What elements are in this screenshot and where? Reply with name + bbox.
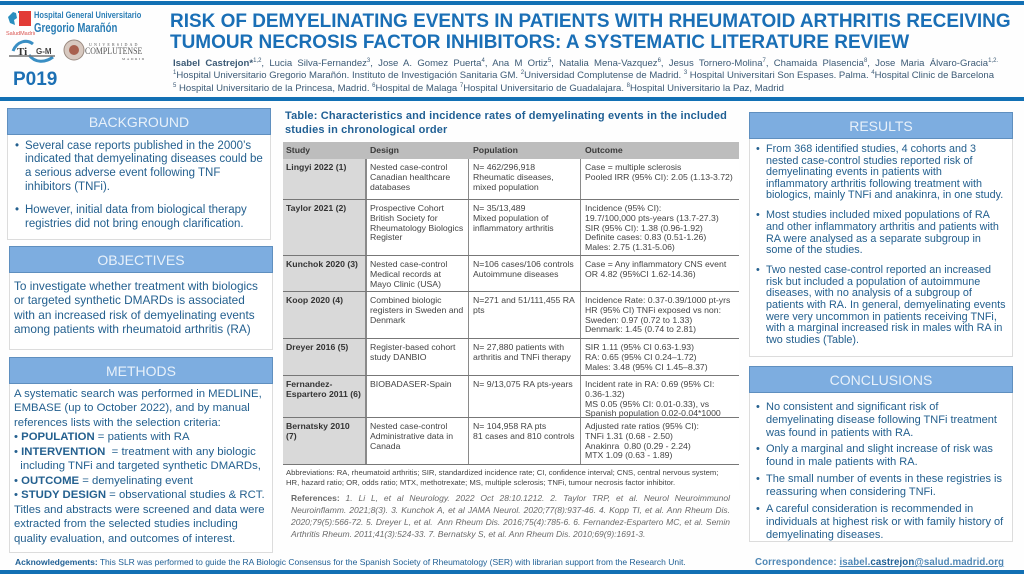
row: Dreyer: Register-based cohort bbox=[370, 342, 455, 352]
bullets: demyelinating events in patients with bbox=[766, 166, 942, 178]
bullets: A careful consideration is recommended in bbox=[766, 503, 973, 515]
row: Taylor: Register bbox=[370, 232, 402, 242]
row: Taylor: Definite cases: 0.83 (0.51-1.26) bbox=[585, 232, 706, 242]
correspondence: Correspondence: isabel.castrejon@salud.madrid.org bbox=[755, 557, 1004, 568]
row: Taylor: N= 35/13,489 bbox=[473, 203, 525, 213]
bullets: individuals at highest risk or with family history of bbox=[766, 516, 1003, 528]
heading: OBJECTIVES bbox=[97, 252, 185, 268]
row: Koop: pts bbox=[473, 305, 485, 315]
methods text: references lists with the selection criteria: bbox=[14, 416, 221, 428]
bottom bar bbox=[0, 570, 1024, 574]
bullets: biologics, mainly TNFi and anakinra, in one study. bbox=[766, 189, 1003, 201]
heading: CONCLUSIONS bbox=[830, 372, 932, 388]
row: Dreyer: SIR 1.11 (95% CI 0.63-1.93) bbox=[585, 342, 694, 352]
table header row: Outcome bbox=[585, 145, 623, 155]
bullets: RA were analysed as a separate subgroup in bbox=[766, 233, 981, 245]
bullets: nested case-control studies reported risk of bbox=[766, 155, 972, 167]
row: Kunchok: Case = Any inflammatory CNS event bbox=[585, 259, 726, 269]
bullets: demyelinating disease following TNFi treatment bbox=[766, 414, 997, 426]
poster number: P019 bbox=[13, 69, 57, 90]
bullets: indicated that demyelinating diseases could be bbox=[25, 153, 263, 165]
row: Dreyer: study DANBIO bbox=[370, 352, 426, 362]
row: Lingyi: Nested case-control bbox=[370, 162, 447, 172]
panel: background bbox=[7, 108, 271, 240]
row: Bernatsky: Nested case-control bbox=[370, 421, 447, 431]
logos bbox=[6, 10, 146, 63]
bullets: some of the studies. bbox=[766, 244, 863, 256]
methods text: Titles and abstracts were screened and data were bbox=[14, 504, 265, 516]
body box bbox=[9, 357, 273, 553]
row: Fernandez-Espartero: MS 0.05 (95% CI: 0.01-0.33), vs bbox=[585, 398, 709, 408]
table header row: Study bbox=[286, 145, 310, 155]
icon: university seal bbox=[64, 40, 84, 60]
row: Fernandez-Espartero: Spanish population 0.02-0.04*1000 bbox=[585, 408, 721, 418]
row: Koop: N=271 and 51/111,455 RA bbox=[473, 295, 575, 305]
bullets: From 368 identified studies, 4 cohorts and 3 bbox=[766, 143, 976, 155]
methods text bbox=[14, 388, 265, 544]
row: Koop: Koop 2020 (4) bbox=[286, 295, 343, 305]
objective text: among patients with rheumatoid arthritis (RA) bbox=[14, 322, 251, 336]
row: Dreyer: N= 27,880 patients with bbox=[473, 342, 564, 352]
authors: 1Hospital Universitario Gregorio Marañón. Instituto de Investigación Sanitaria GM. 2Universidad Complutense de Madrid. 3 Hospital Universitari Son Espases. Palma. 4Hospital Clinic de Barcelona bbox=[173, 70, 994, 81]
table header row: Population bbox=[473, 145, 518, 155]
acknowledgements: Acknowledgements: This SLR was performed to guide the RA Biologic Consensus for the Spanish Society of Rheumatology (SER) with librarian support from the Research Unit. bbox=[15, 557, 686, 567]
row: Lingyi: Case = multiple sclerosis bbox=[585, 162, 681, 172]
row: Lingyi: Rheumatic diseases, bbox=[473, 172, 554, 182]
row: Taylor: SIR (95% CI): 1.38 (0.96-1.92) bbox=[585, 222, 703, 232]
heading bbox=[9, 246, 273, 273]
row: Fernandez-Espartero: Espartero 2011 (6) bbox=[286, 389, 361, 399]
row: Lingyi bbox=[286, 162, 733, 192]
heading bbox=[7, 108, 271, 135]
row: Kunchok: Mayo Clinic (USA) bbox=[370, 278, 441, 288]
row: Bernatsky: Canada bbox=[370, 440, 400, 450]
row: Fernandez-Espartero: 0.36-1.32) bbox=[585, 389, 625, 399]
row: Taylor bbox=[286, 203, 719, 252]
abbreviations bbox=[286, 468, 718, 487]
university wordmark: COMPLUTENSE bbox=[85, 46, 142, 57]
objective text bbox=[14, 279, 258, 336]
authors: Isabel Castrejon*1,2, Lucia Silva-Fernandez3, Jose A. Gomez Puerta4, Ana M Ortiz5, Natalia Mena-Vazquez6, Jesus Tornero-Molina7, Chamaida Plasencia8, Jose Maria Álvaro-Gracia1,2. bbox=[173, 58, 998, 69]
table caption: Table: Characteristics and incidence rates of demyelinating events in the included bbox=[285, 110, 727, 122]
column lines bbox=[365, 159, 366, 464]
bullets: and other inflammatory arthritis and patients with bbox=[766, 221, 999, 233]
abbreviations: Abbreviations: RA, rheumatoid arthritis; SIR, standardized incidence rate; CI, confidence interval; CNS, central nervous system; bbox=[286, 468, 718, 477]
bullets: diseases, with no analysis of a subgroup of bbox=[766, 287, 972, 299]
row: Lingyi: mixed population bbox=[473, 182, 539, 192]
panel: results bbox=[749, 112, 1013, 357]
heading: BACKGROUND bbox=[89, 114, 189, 130]
authors: 5 Hospital Universitario de la Princesa, Madrid. 6Hospital de Malaga 7Hospital Universitario de Guadalajara. 8Hospital Universitario la Paz, Madrid bbox=[173, 82, 784, 94]
methods text: including TNFi and targeted synthetic DMARDs, bbox=[20, 460, 261, 472]
university wordmark bbox=[85, 42, 146, 61]
row: Taylor: Rheumatology Biologics bbox=[370, 222, 463, 232]
table bbox=[283, 141, 739, 490]
row: Bernatsky: MTX 1.09 (0.63 - 1.89) bbox=[585, 450, 672, 460]
row: Taylor: Taylor 2021 (2) bbox=[286, 203, 346, 213]
row: Kunchok: Medical records at bbox=[370, 269, 441, 279]
abbreviations: HR, hazard ratio; OR, odds ratio; MTX, methotrexate; MS, multiple sclerosis; TNFi, tumour necrosis factor inhibitor. bbox=[286, 478, 675, 487]
table caption: studies in chronological order bbox=[285, 124, 448, 136]
row: Bernatsky: Administrative data in bbox=[370, 431, 453, 441]
references: Neuroinflamm. 2021;8(3). 3. Kunchok A, et al JAMA Neurol. 2020;77(8):937-46. 4. Kopp TI, et al. Ann Rheum Dis. bbox=[291, 505, 730, 515]
body box bbox=[749, 112, 1013, 357]
row: Koop bbox=[286, 295, 730, 334]
row: Fernandez-Espartero: N= 9/13,075 RA pts-years bbox=[473, 379, 573, 389]
row: Koop: Sweden: 0.97 (0.72 to 1.33) bbox=[585, 314, 692, 324]
university wordmark: MADRID bbox=[122, 57, 146, 61]
row: Bernatsky: N= 104,958 RA pts bbox=[473, 421, 546, 431]
row: Koop: Combined biologic bbox=[370, 295, 441, 305]
bullets: Only a marginal and slight increase of risk was bbox=[766, 443, 993, 455]
methods text: quality evaluation, and outcomes of interest. bbox=[14, 532, 235, 544]
bullets: registries did not bring enough clarification. bbox=[25, 218, 244, 230]
row: Fernandez-Espartero bbox=[286, 379, 721, 418]
bullets: demyelinating diseases. bbox=[766, 529, 883, 541]
objective text: To investigate whether treatment with biologics bbox=[14, 279, 258, 293]
university wordmark: UNIVERSIDAD bbox=[89, 42, 139, 47]
bullets: However, initial data from biological therapy bbox=[25, 204, 247, 216]
row: Taylor: British Society for bbox=[370, 213, 438, 223]
row: Kunchok: Nested case-control bbox=[370, 259, 447, 269]
row: Bernatsky: TNFi 1.31 (0.68 - 2.50) bbox=[585, 431, 673, 441]
bullets bbox=[15, 140, 263, 230]
bullets: a serious adverse event following TNF bbox=[25, 167, 220, 179]
row: Lingyi: Canadian healthcare bbox=[370, 172, 450, 182]
top bar bbox=[0, 1, 1024, 5]
row: Bernatsky: 81 cases and 810 controls bbox=[473, 431, 574, 441]
icon: hospital logo bbox=[6, 11, 35, 36]
row: Taylor: Males: 2.75 (1.31-5.06) bbox=[585, 242, 675, 252]
heading: METHODS bbox=[106, 363, 176, 379]
row: Koop: Denmark: 1.45 (0.74 to 2.81) bbox=[585, 324, 696, 334]
row: Dreyer: Males: 3.48 (95% CI 1.45–8.37) bbox=[585, 362, 708, 372]
heading bbox=[9, 357, 273, 384]
bullets: No consistent and significant risk of bbox=[766, 400, 938, 412]
hospital name second line: Gregorio Marañón bbox=[34, 21, 117, 35]
row: Koop: Denmark bbox=[370, 314, 405, 324]
row: Dreyer bbox=[286, 342, 708, 372]
methods text: • INTERVENTION = treatment with any biologic bbox=[14, 446, 256, 458]
row: Kunchok: Kunchok 2020 (3) bbox=[286, 259, 358, 269]
row lines bbox=[283, 199, 739, 200]
row: Kunchok: N=106 cases/106 controls bbox=[473, 259, 574, 269]
bullets: Two nested case-control reported an increased bbox=[766, 264, 991, 276]
bullets: reassuring when considering TNFi. bbox=[766, 486, 936, 498]
row: Kunchok: OR 4.82 (95%CI 1.62-14.36) bbox=[585, 269, 696, 279]
objective text: or targeted synthetic DMARDs is associated bbox=[14, 293, 245, 307]
table caption bbox=[285, 110, 727, 136]
bullets: inflammatory arthritis following treatment with bbox=[766, 178, 982, 190]
methods text: • STUDY DESIGN = observational studies & RCT. bbox=[14, 489, 265, 501]
bullets: inhibitors (TNFi). bbox=[25, 181, 110, 193]
body box bbox=[9, 246, 273, 350]
title: RISK OF DEMYELINATING EVENTS IN PATIENTS WITH RHEUMATOID ARTHRITIS RECEIVING bbox=[170, 11, 1011, 32]
row: Fernandez-Espartero: Incident rate in RA: 0.69 (95% CI: bbox=[585, 379, 714, 389]
title bbox=[170, 11, 1011, 53]
references: References: 1. Li L, et al Neurology. 2022 Oct 28:10.1212. 2. Taylor TRP, et al. Neurol Neuroimmunol bbox=[291, 493, 730, 503]
row: Bernatsky: Adjusted rate ratios (95% CI): bbox=[585, 421, 699, 431]
row: Dreyer: RA: 0.65 (95% CI 0.24–1.72) bbox=[585, 352, 697, 362]
icon: IiSGM logo bbox=[9, 40, 55, 63]
references bbox=[290, 493, 730, 539]
row: Taylor: 19.7/100,000 pts-years (13.7-27.3) bbox=[585, 213, 719, 223]
hospital name: Hospital General Universitario bbox=[34, 10, 141, 21]
body box bbox=[7, 108, 271, 240]
row: Taylor: inflammatory arthritis bbox=[473, 222, 554, 232]
row: Bernatsky: Anakinra 0.80 (0.29 - 2.24) bbox=[585, 440, 691, 450]
row: Lingyi: Lingyi 2022 (1) bbox=[286, 162, 346, 172]
row: Dreyer: arthritis and TNFi therapy bbox=[473, 352, 571, 362]
panel: conclusions bbox=[749, 366, 1013, 542]
methods text: • POPULATION = patients with RA bbox=[14, 431, 190, 443]
bullets: Most studies included mixed populations of RA bbox=[766, 209, 990, 221]
row: Kunchok bbox=[286, 259, 726, 288]
row: Taylor: Incidence (95% CI): bbox=[585, 203, 661, 213]
title: TUMOUR NECROSIS FACTOR INHIBITORS: A SYSTEMATIC LITERATURE REVIEW bbox=[170, 32, 909, 53]
row: Lingyi: databases bbox=[370, 182, 410, 192]
bullets: risk but included a population of autoimmune bbox=[766, 276, 980, 288]
row: Koop: registers in Sweden and bbox=[370, 305, 463, 315]
authors bbox=[173, 58, 998, 94]
icon: IiSGM logo: G-M bbox=[36, 47, 52, 56]
row: Lingyi: Pooled IRR (95% CI): 2.05 (1.13-3.72) bbox=[585, 172, 733, 182]
bullets: patients with RA. In general, demyelinating events bbox=[766, 299, 1005, 311]
methods text: A systematic search was performed in MEDLINE, bbox=[14, 388, 262, 400]
references: 2020;79(5):566-72. 5. Dreyer L, et al. Ann Rheum Dis. 2016;75(4):785-6. 6. Fernandez-Espartero MC, et al. Semin bbox=[291, 517, 730, 527]
heading bbox=[749, 112, 1013, 139]
heading bbox=[749, 366, 1013, 393]
bullets: found in male patients with RA. bbox=[766, 456, 918, 468]
row: Lingyi: N= 462/296,918 bbox=[473, 162, 535, 172]
bullets: The small number of events in these registries is bbox=[766, 473, 1002, 485]
references: Arthritis Rheum. 2011;41(3):524-33. 7. Bernatsky S, et al. Ann Rheum Dis. 2010;69(9):1691-3. bbox=[291, 529, 645, 539]
bullets: Several case reports published in the 2000’s bbox=[25, 140, 251, 152]
panel: methods bbox=[9, 357, 273, 553]
bullets: two studies (Table). bbox=[766, 334, 859, 346]
row: Bernatsky bbox=[286, 421, 699, 460]
objective text: with an increased risk of demyelinating events bbox=[14, 308, 255, 322]
header rule bbox=[0, 97, 1024, 100]
row: Bernatsky: (7) bbox=[286, 431, 297, 441]
first column shading bbox=[283, 159, 365, 464]
bullets: were very uncommon in patients receiving TNFi, bbox=[766, 310, 997, 322]
row: Kunchok: Autoimmune diseases bbox=[473, 269, 558, 279]
row: Fernandez-Espartero: Fernandez- bbox=[286, 379, 332, 389]
row: Koop: Incidence Rate: 0.37-0.39/1000 pt-yrs bbox=[585, 295, 730, 305]
panel: objectives bbox=[9, 246, 273, 350]
bullets: was found in patients with RA. bbox=[766, 427, 913, 439]
bullets bbox=[756, 400, 1004, 541]
body box bbox=[749, 366, 1013, 542]
methods text: extracted from the selected studies including bbox=[14, 518, 238, 530]
methods text: EMBASE (up to October 2022), and by manual bbox=[14, 402, 250, 414]
row: Taylor: Prospective Cohort bbox=[370, 203, 444, 213]
row: Koop: HR (95% CI) TNFi exposed vs non: bbox=[585, 305, 721, 315]
bullets: with a marginal increased risk in males with RA in bbox=[766, 322, 1002, 334]
icon: IiSGM logo: Ti bbox=[17, 46, 27, 58]
methods text: • OUTCOME = demyelinating event bbox=[14, 474, 193, 486]
bullets bbox=[756, 143, 1006, 346]
table header row: Design bbox=[370, 145, 399, 155]
row: Dreyer: Dreyer 2016 (5) bbox=[286, 342, 348, 352]
table header row bbox=[283, 142, 739, 159]
heading: RESULTS bbox=[849, 118, 913, 134]
row: Bernatsky: Bernatsky 2010 bbox=[286, 421, 350, 431]
row: Fernandez-Espartero: BIOBADASER-Spain bbox=[370, 379, 452, 389]
row: Taylor: Mixed population of bbox=[473, 213, 548, 223]
